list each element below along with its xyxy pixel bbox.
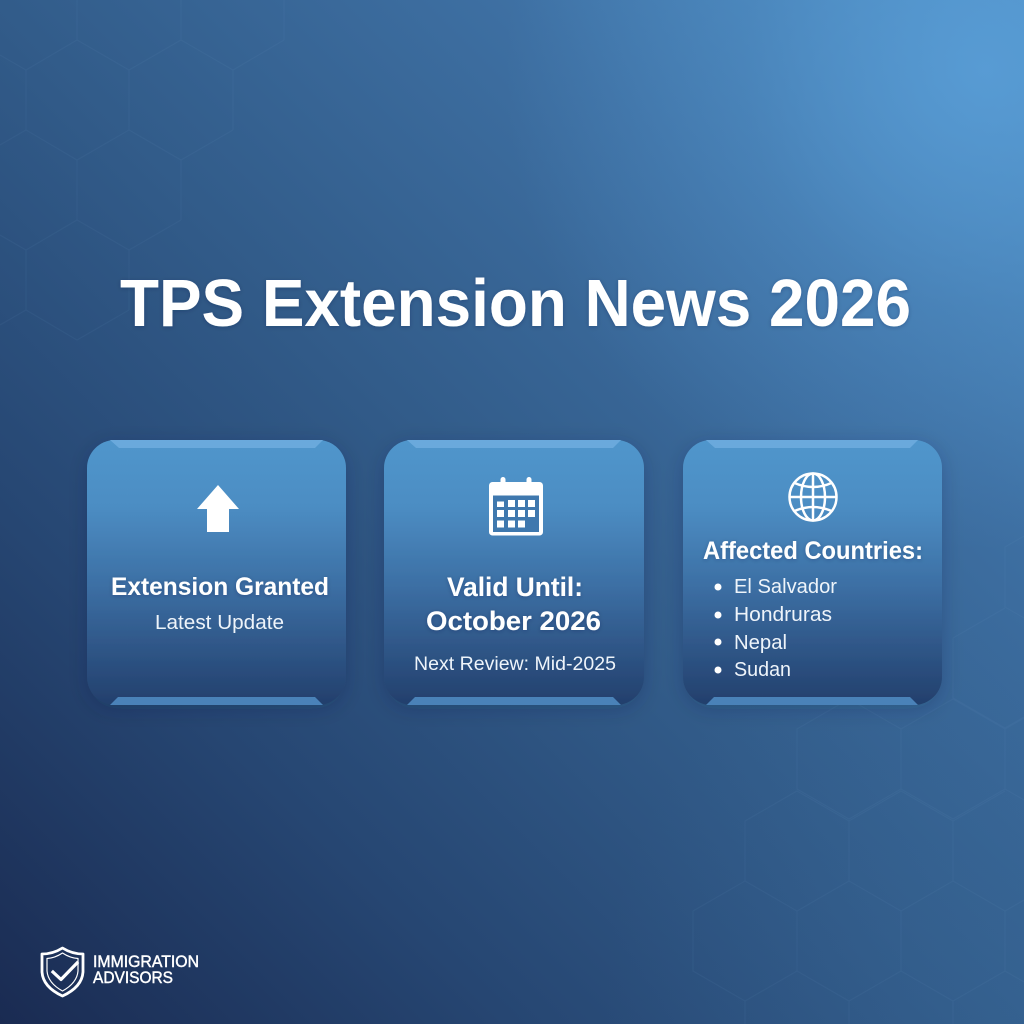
text: latest update: Latest Update — [155, 612, 284, 634]
logo text: IMMIGRATION — [93, 953, 199, 971]
heading: october 2026: October 2026 — [426, 606, 601, 636]
list: countries: Sudan — [734, 659, 791, 681]
icon: globe — [790, 474, 836, 520]
heading: valid until: Valid Until: — [447, 572, 583, 602]
heading: affected countries: Affected Countries: — [703, 537, 923, 565]
heading: extension granted: Extension Granted — [111, 573, 329, 601]
icon: shield check — [42, 948, 83, 996]
logo text — [93, 953, 199, 987]
list: countries: Nepal — [734, 632, 787, 654]
list: countries: Hondruras — [734, 604, 832, 626]
logo text: ADVISORS — [93, 969, 173, 987]
panel: extension granted — [87, 440, 346, 705]
icon: calendar — [489, 477, 543, 536]
list: countries: El Salvador — [734, 576, 837, 598]
list: countries — [714, 576, 837, 681]
panel: affected countries — [683, 440, 942, 705]
logo: immigration advisors — [42, 948, 199, 996]
text: next review: Next Review: Mid-2025 — [414, 654, 616, 675]
title: TPS Extension News 2026 — [120, 266, 911, 341]
icon: up arrow — [197, 485, 239, 532]
panel: valid until — [384, 440, 644, 705]
